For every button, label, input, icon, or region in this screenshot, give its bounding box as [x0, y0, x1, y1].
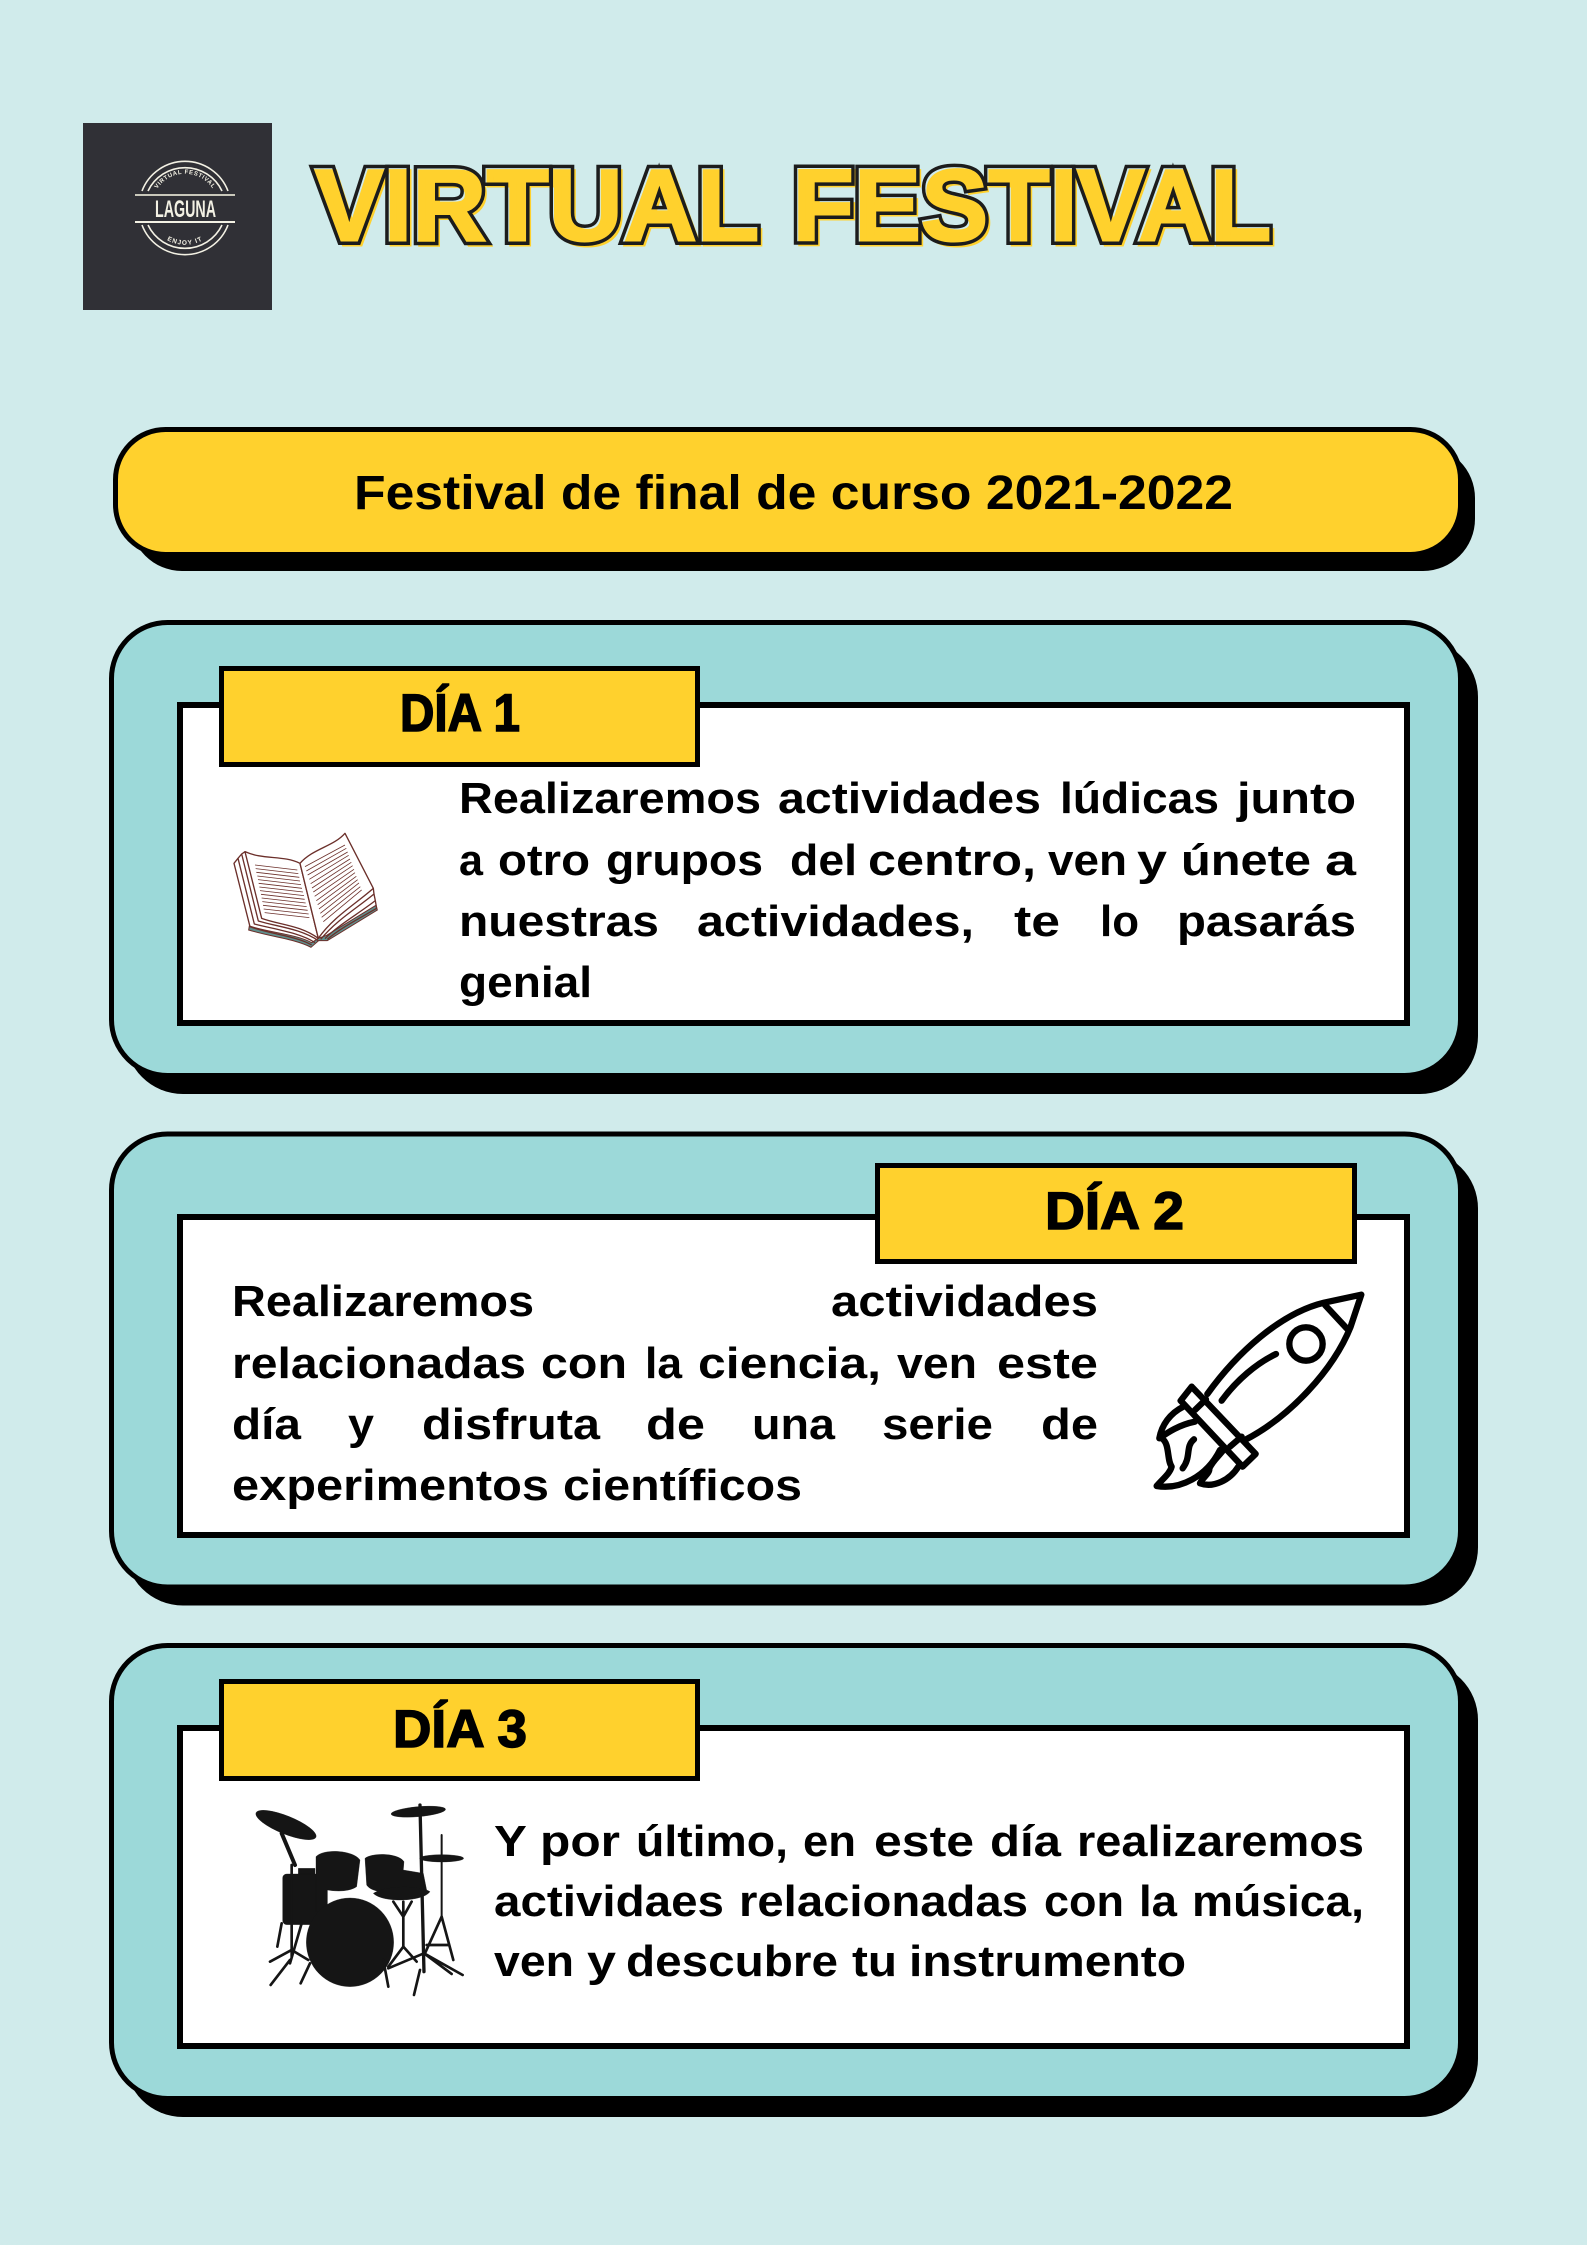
text: día 3 description: por — [540, 1817, 620, 1866]
logo: Laguna badge: LAGUNA — [155, 196, 216, 223]
text: día 1 description: a — [1325, 836, 1357, 885]
text: día 1 description: grupos — [606, 836, 763, 885]
text: día 2 description: relacionadas — [232, 1339, 526, 1388]
text: día 3 description: realizaremos — [1077, 1817, 1364, 1866]
text: día 3 description: ven — [494, 1937, 574, 1986]
text: día 3 description: música, — [1192, 1877, 1364, 1926]
text: día 2 description: con — [541, 1339, 627, 1388]
title: VIRTUAL — [315, 148, 759, 262]
tag: día 1: DÍA 1 — [400, 683, 520, 743]
text: día 1 description: nuestras — [459, 897, 659, 946]
text: día 3 description — [494, 1817, 1364, 1986]
text: día 2 description: disfruta — [422, 1400, 601, 1449]
logo: Laguna badge: ENJOY IT — [167, 236, 201, 245]
text: día 1 description: lúdicas — [1060, 774, 1219, 823]
text: día 2 description: serie — [882, 1400, 993, 1449]
text: día 3 description: relacionadas — [739, 1877, 1028, 1926]
text: día 3 description: Y — [494, 1817, 526, 1866]
text: día 2 description: experimentos — [232, 1461, 549, 1510]
text: día 2 description: día — [232, 1400, 302, 1449]
text: día 2 description: científicos — [563, 1461, 802, 1510]
text: día 1 description: actividades, — [697, 897, 974, 946]
text: día 3 description: y — [587, 1937, 617, 1986]
title: FESTIVAL — [792, 148, 1271, 262]
text: día 1 description: Realizaremos — [459, 774, 761, 823]
icon: drum kit — [253, 1804, 464, 1995]
text: día 2 description: actividades — [831, 1277, 1098, 1326]
text: día 3 description: último, — [636, 1817, 788, 1866]
text: día 2 description: Realizaremos — [232, 1277, 534, 1326]
text: día 3 description: instrumento — [909, 1937, 1186, 1986]
text: día 2 description: este — [997, 1339, 1098, 1388]
text: día 3 description: descubre — [626, 1937, 838, 1986]
text: día 2 description: de — [646, 1400, 705, 1449]
panel: día 1 — [112, 622, 1478, 1094]
text: día 2 description: y — [348, 1400, 375, 1449]
text: día 1 description: genial — [459, 958, 592, 1007]
text: día 3 description: con — [1044, 1877, 1124, 1926]
title — [308, 162, 1274, 248]
text: día 1 description: centro, — [868, 836, 1036, 885]
text: día 2 description: la — [645, 1339, 683, 1388]
tag: día 3: DÍA 3 — [393, 1699, 527, 1759]
text: día 1 description — [459, 774, 1357, 1007]
logo: Laguna badge — [83, 123, 272, 310]
text: día 1 description: otro — [498, 836, 590, 885]
text: día 3 description: actividaes — [494, 1877, 724, 1926]
banner: festival heading — [116, 430, 1475, 571]
text: día 3 description: día — [990, 1817, 1062, 1866]
text: día 1 description: lo — [1100, 897, 1139, 946]
text: día 1 description: a — [459, 836, 484, 885]
text: día 1 description: y — [1137, 836, 1168, 885]
text: día 3 description: en — [803, 1817, 856, 1866]
text: día 1 description: del — [790, 836, 857, 885]
panel: día 2 — [112, 1134, 1478, 1606]
text: día 2 description: ven — [897, 1339, 977, 1388]
text: día 3 description: la — [1139, 1877, 1178, 1926]
tag: día 2: DÍA 2 — [1045, 1181, 1184, 1241]
text: día 1 description: únete — [1181, 836, 1311, 885]
text: día 2 description: de — [1041, 1400, 1098, 1449]
text: día 1 description: junto — [1236, 774, 1356, 823]
tag: día 3 — [222, 1682, 698, 1778]
icon: rocket — [1157, 1295, 1361, 1487]
text: día 1 description: actividades — [778, 774, 1041, 823]
panel: día 3 — [112, 1646, 1478, 2117]
title: VIRTUAL — [318, 151, 762, 265]
tag: día 1 — [222, 668, 698, 764]
text: día 2 description: una — [752, 1400, 836, 1449]
text: día 1 description: te — [1014, 897, 1060, 946]
text: día 1 description: pasarás — [1177, 897, 1356, 946]
icon: open book — [234, 833, 377, 947]
text: día 1 description: ven — [1048, 836, 1127, 885]
text: día 3 description: tu — [852, 1937, 897, 1986]
banner: festival heading: Festival de final de curso 2021-2022 — [354, 467, 1233, 520]
text: día 2 description: ciencia, — [698, 1339, 881, 1388]
text: día 3 description: este — [874, 1817, 974, 1866]
tag: día 2 — [878, 1166, 1354, 1262]
title: FESTIVAL — [795, 151, 1274, 265]
logo: Laguna badge: VIRTUAL FESTIVAL — [154, 170, 214, 188]
text: día 2 description — [232, 1277, 1098, 1510]
